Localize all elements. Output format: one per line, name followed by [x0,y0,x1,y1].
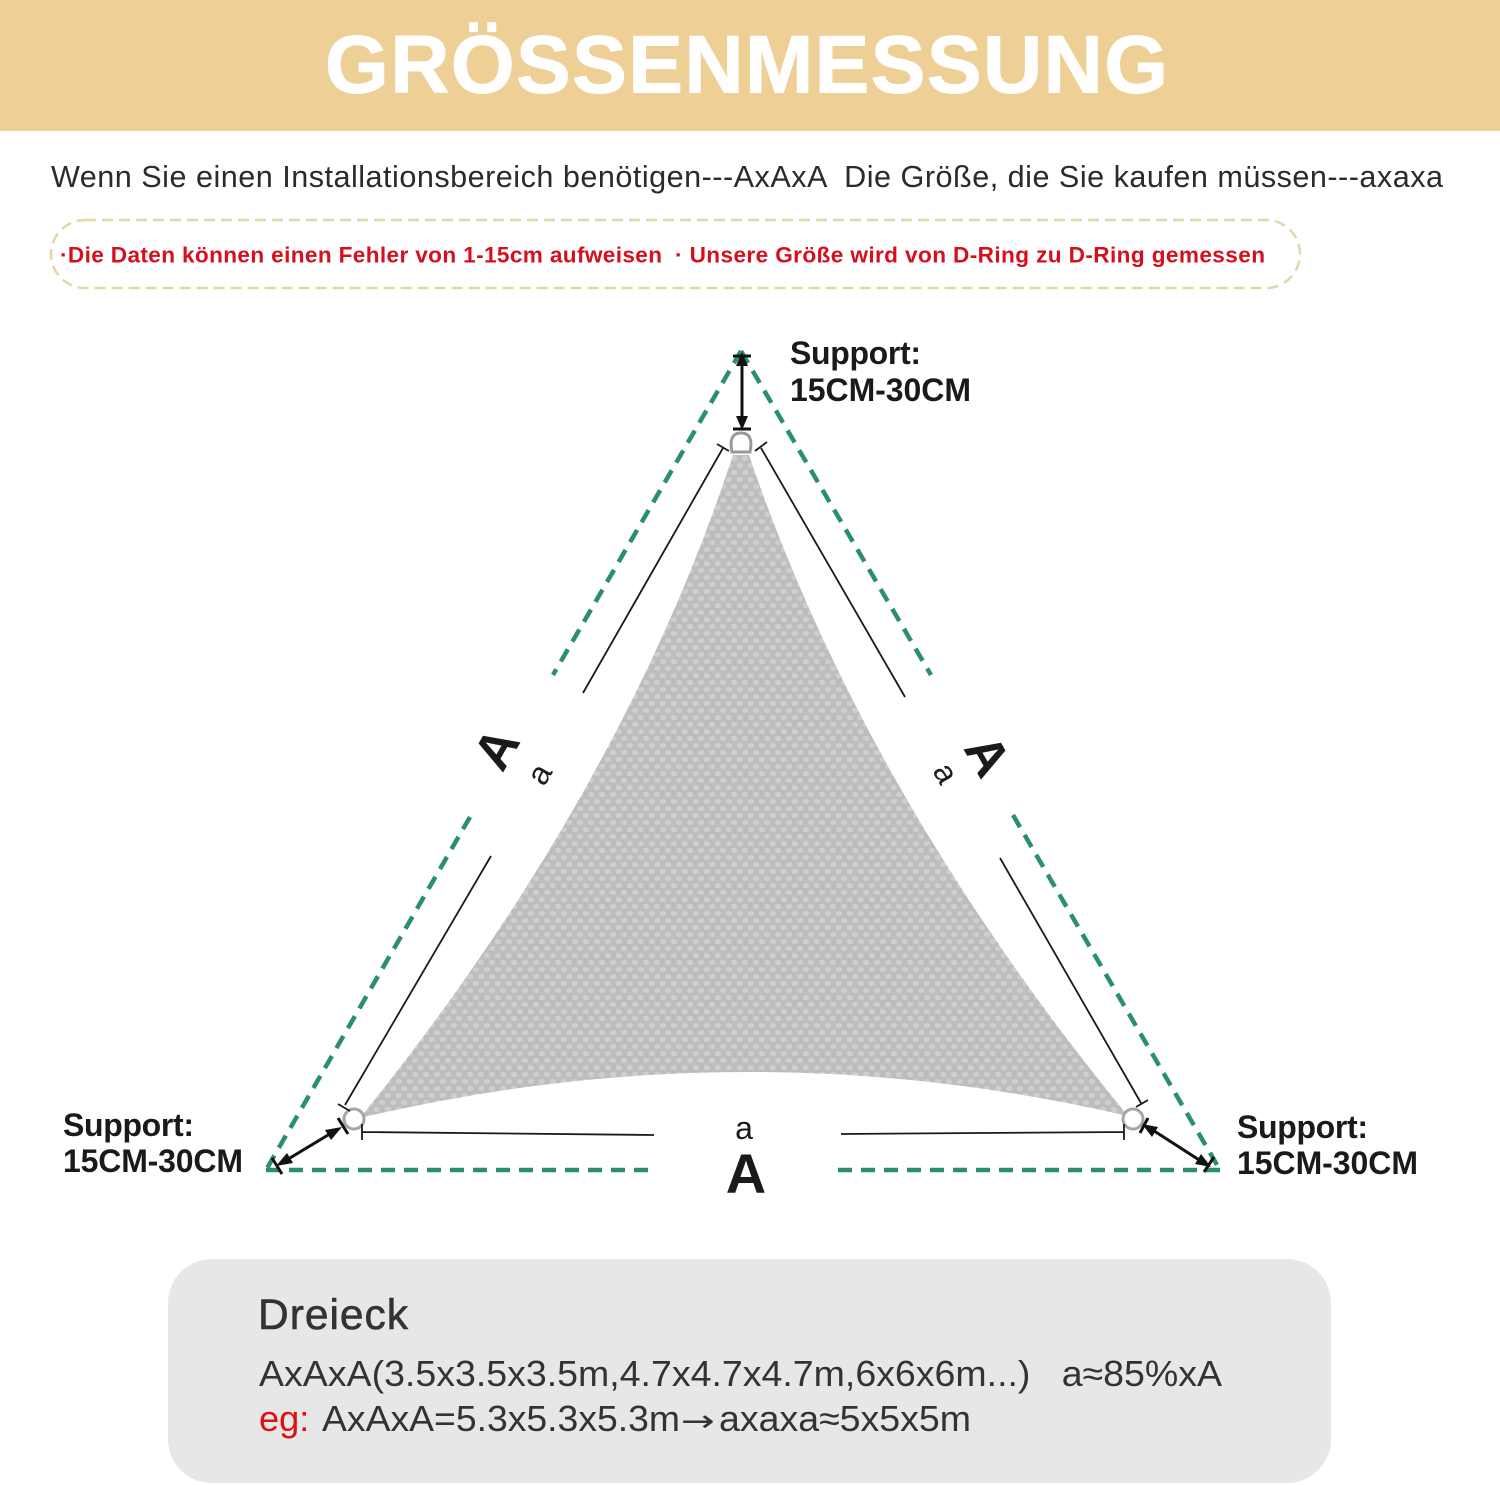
title: GRÖSSENMESSUNG [325,20,1168,110]
example: eg: [259,1398,309,1439]
dimension labels: left side: A [462,718,532,780]
note: tolerance: ·Die Daten können einen Fehler von 1-15cm aufweisen [60,242,662,268]
size a: thin measure lines [338,442,1148,1140]
example [259,1398,971,1439]
label: right support: 15CM-30CM [1237,1145,1418,1181]
triangle sail diagram [63,335,1418,1205]
example: → [681,1404,715,1439]
example: axaxa≈5x5x5m [719,1398,971,1439]
dimension labels: bottom side: A [726,1142,766,1205]
label: top support: Support: [790,335,921,371]
panel: triangle sizes [168,1259,1331,1483]
dimension labels: right side: a [926,756,966,790]
support arrows [272,356,1214,1174]
size formula: AxAxA(3.5x3.5x3.5m,4.7x4.7x4.7m,6x6x6m...) a≈85%xA [259,1353,1223,1394]
callout: measurement notes [51,220,1300,288]
dimension labels: left side: a [519,757,559,791]
dimension labels: left side [462,718,559,791]
label: right support [1237,1109,1418,1181]
label: top support: 15CM-30CM [790,372,971,408]
header banner [0,0,1500,131]
label: right support: Support: [1237,1109,1368,1145]
label: left support [63,1107,243,1179]
panel heading: Dreieck [258,1292,409,1339]
D-ring: right [1123,1109,1143,1129]
example: AxAxA=5.3x5.3x5.3m [322,1398,680,1439]
label: left support: 15CM-30CM [63,1143,243,1179]
shade sail [360,455,1128,1118]
dimension labels: right side: A [952,725,1022,787]
dimension labels: bottom side [726,1110,766,1205]
label: left support: Support: [63,1107,194,1143]
dimension labels: bottom side: a [735,1110,753,1146]
dimension labels: right side [926,725,1022,790]
intro text line: Wenn Sie einen Installationsbereich benötigen---AxAxA Die Größe, die Sie kaufen müssen---axaxa [51,160,1444,194]
D-ring: left [344,1109,364,1129]
installation area: green dashed outline [266,351,1220,1170]
D-ring: top [731,433,751,452]
label: top support [790,335,971,408]
note: measured ring to ring: · Unsere Größe wird von D-Ring zu D-Ring gemessen [675,242,1265,268]
